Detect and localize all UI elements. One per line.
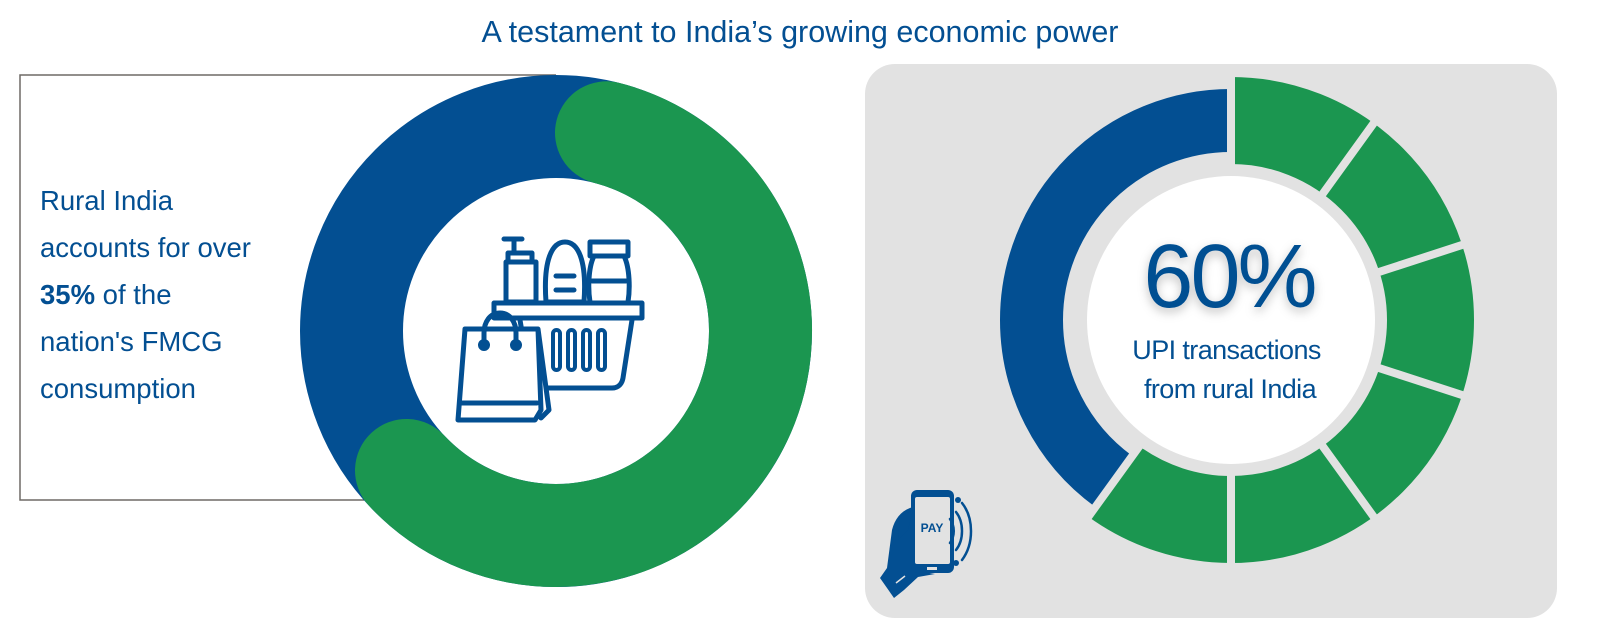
FMCG text: Rural India [40,185,174,216]
donut chart: FMCG share [352,126,761,536]
FMCG text: nation's FMCG [40,326,223,357]
big number 60%: 60% [1143,227,1315,327]
panel background [865,64,1557,618]
FMCG text: accounts for over [40,232,251,263]
FMCG text: consumption [40,373,196,404]
panel: UPI [865,64,1557,618]
icon: hand holding phone PAY [880,490,971,598]
UPI label: from rural India [1144,374,1318,404]
segmented donut chart: UPI share [1032,76,1466,564]
icon: shopping basket and bag [458,239,642,420]
icon: hand holding phone PAY: PAY [921,521,943,535]
text box frame [20,75,556,500]
title: A testament to India’s growing economic power [482,15,1118,49]
UPI label: UPI transactions [1132,335,1321,365]
FMCG text: 35% of the [40,279,172,310]
panel: FMCG [20,75,761,536]
